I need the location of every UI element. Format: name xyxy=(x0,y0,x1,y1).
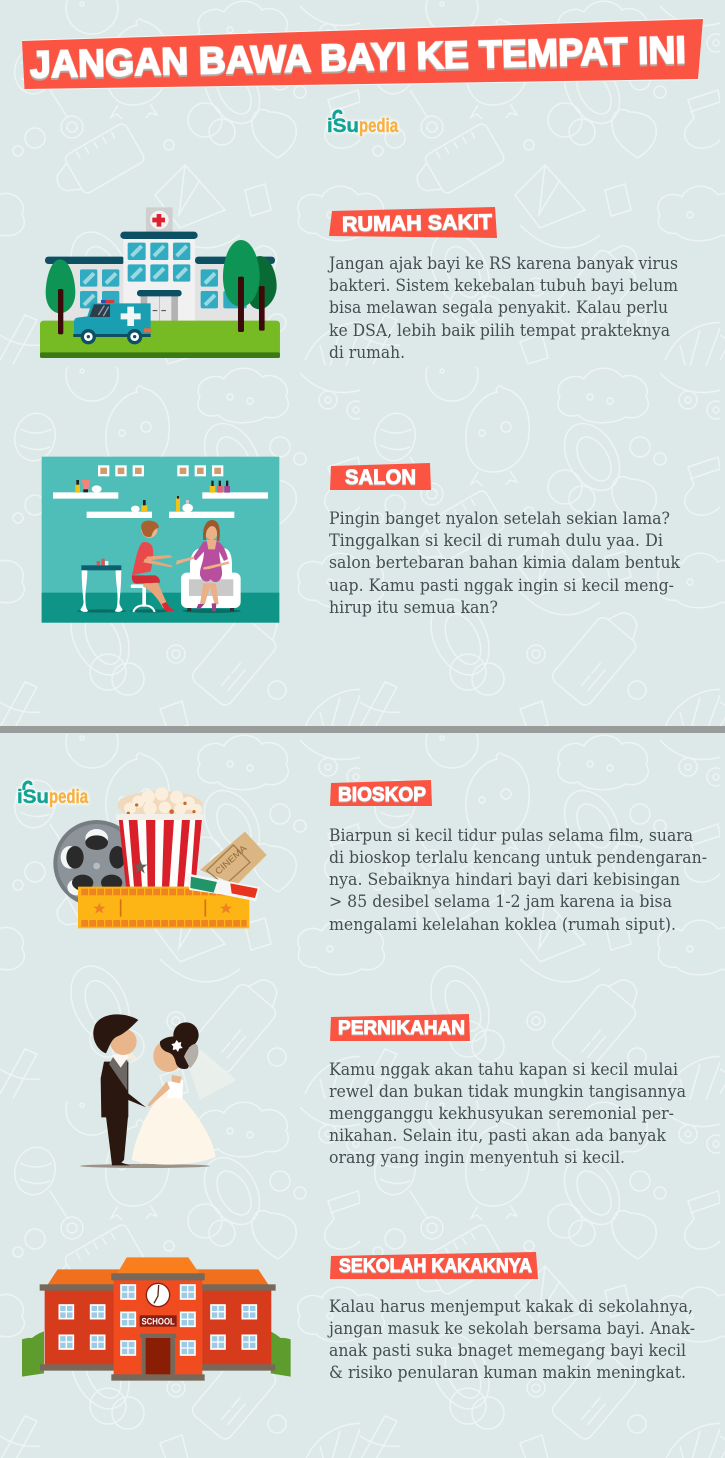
text: sekolah kakaknya xyxy=(327,1297,695,1382)
text: bioskop: Biarpun si kecil tidur pulas selama film, suara xyxy=(329,826,693,845)
section: rumah sakit xyxy=(327,207,678,362)
wall frames xyxy=(98,465,223,476)
text: rumah sakit: bisa melawan segala penyakit. Kalau perlu xyxy=(329,298,668,317)
bride xyxy=(132,1022,237,1165)
text: bioskop: mengalami kelelahan koklea (rumah siput). xyxy=(329,915,676,934)
logo middle: pedia xyxy=(49,787,88,808)
text: bioskop xyxy=(329,826,707,934)
text: pernikahan: nikahan. Selain itu, pasti akan ada banyak xyxy=(329,1126,667,1145)
school sign: SCHOOL xyxy=(141,1317,175,1327)
text: pernikahan: Kamu nggak akan tahu kapan si kecil mulai xyxy=(329,1060,678,1079)
text: pernikahan: rewel dan bukan tidak mungkin tangisannya xyxy=(329,1082,686,1101)
heading: bioskop: BIOSKOP xyxy=(338,784,426,806)
salon illustration xyxy=(42,457,279,623)
title banner xyxy=(22,18,703,90)
text: pernikahan: mengganggu kekhusyukan seremonial per- xyxy=(329,1104,674,1123)
logo top: iSu xyxy=(327,116,359,137)
logo top xyxy=(327,111,398,137)
bushes xyxy=(22,1331,291,1377)
text: salon: uap. Kamu pasti nggak ingin si kecil meng- xyxy=(329,576,674,595)
divider xyxy=(0,726,725,733)
door xyxy=(140,1334,176,1374)
salon room xyxy=(42,457,279,623)
text: sekolah kakaknya: Kalau harus menjemput kakak di sekolahnya, xyxy=(329,1297,693,1316)
heading: pernikahan: PERNIKAHAN xyxy=(338,1018,465,1039)
shelves with bottles xyxy=(53,480,268,518)
section: salon xyxy=(329,463,681,617)
shadows xyxy=(77,609,241,613)
clock xyxy=(146,1283,170,1307)
ambulance xyxy=(73,300,151,344)
text: salon: Tinggalkan si kecil di rumah dulu yaa. Di xyxy=(329,531,663,550)
text: sekolah kakaknya: & risiko penularan kuman makin meningkat. xyxy=(329,1363,686,1382)
school wings xyxy=(40,1269,276,1371)
heading: sekolah kakaknya: SEKOLAH KAKAKNYA xyxy=(339,1256,532,1277)
film reel xyxy=(53,820,140,907)
wedding couple illustration xyxy=(80,1014,237,1168)
cinema illustration xyxy=(53,787,267,928)
text: sekolah kakaknya: jangan masuk ke sekolah bersama bayi. Anak- xyxy=(327,1319,695,1338)
film strip xyxy=(78,887,249,928)
text: pernikahan: orang yang ingin menyentuh si kecil. xyxy=(329,1148,625,1167)
heading: salon xyxy=(330,463,431,490)
text: bioskop: > 85 desibel selama 1-2 jam karena ia bisa xyxy=(329,892,672,911)
text: rumah sakit: di rumah. xyxy=(329,343,405,362)
text: rumah sakit: Jangan ajak bayi ke RS karena banyak virus xyxy=(327,254,678,273)
text: rumah sakit: ke DSA, lebih baik pilih tempat prakteknya xyxy=(329,321,670,340)
3D glasses xyxy=(187,873,260,901)
windows xyxy=(59,1285,256,1355)
ticket: CINEMA xyxy=(213,843,250,877)
logo top: pedia xyxy=(359,116,398,137)
window bars xyxy=(59,1285,256,1355)
ground shadow xyxy=(80,1164,210,1168)
logo middle: iSu xyxy=(17,787,49,808)
trees xyxy=(46,240,277,334)
client in armchair xyxy=(176,520,241,611)
central tower xyxy=(111,1257,205,1381)
text: pernikahan xyxy=(329,1060,686,1167)
text: salon: salon bertebaran bahan kimia dalam bentuk xyxy=(329,553,681,572)
title text: JANGAN BAWA BAYI KE TEMPAT INI xyxy=(30,30,686,86)
ticket xyxy=(200,832,267,885)
hospital illustration xyxy=(40,207,280,358)
school illustration xyxy=(22,1257,291,1381)
heading: salon: SALON xyxy=(345,466,416,489)
popcorn xyxy=(116,787,203,887)
manicurist xyxy=(131,521,175,612)
text: rumah sakit xyxy=(327,254,678,362)
heading: rumah sakit: RUMAH SAKIT xyxy=(342,211,492,236)
text: salon xyxy=(329,509,681,617)
text: bioskop: nya. Sebaiknya hindari bayi dari kebisingan xyxy=(329,870,680,889)
text: salon: hirup itu semua kan? xyxy=(329,598,498,617)
lawn xyxy=(40,321,280,358)
section: pernikahan xyxy=(329,1014,686,1167)
text: salon: Pingin banget nyalon setelah sekian lama? xyxy=(329,509,670,528)
logo middle xyxy=(17,782,88,808)
groom xyxy=(93,1014,146,1165)
text: bioskop: di bioskop terlalu kencang untuk pendengaran- xyxy=(329,848,707,867)
nail table xyxy=(80,559,123,612)
text: sekolah kakaknya: anak pasti suka bnaget memegang bayi kecil xyxy=(329,1341,686,1360)
text: rumah sakit: bakteri. Sistem kekebalan tubuh bayi belum xyxy=(329,276,678,295)
section: sekolah kakaknya xyxy=(327,1252,695,1382)
hospital wings xyxy=(45,207,275,329)
section: bioskop xyxy=(329,780,707,934)
